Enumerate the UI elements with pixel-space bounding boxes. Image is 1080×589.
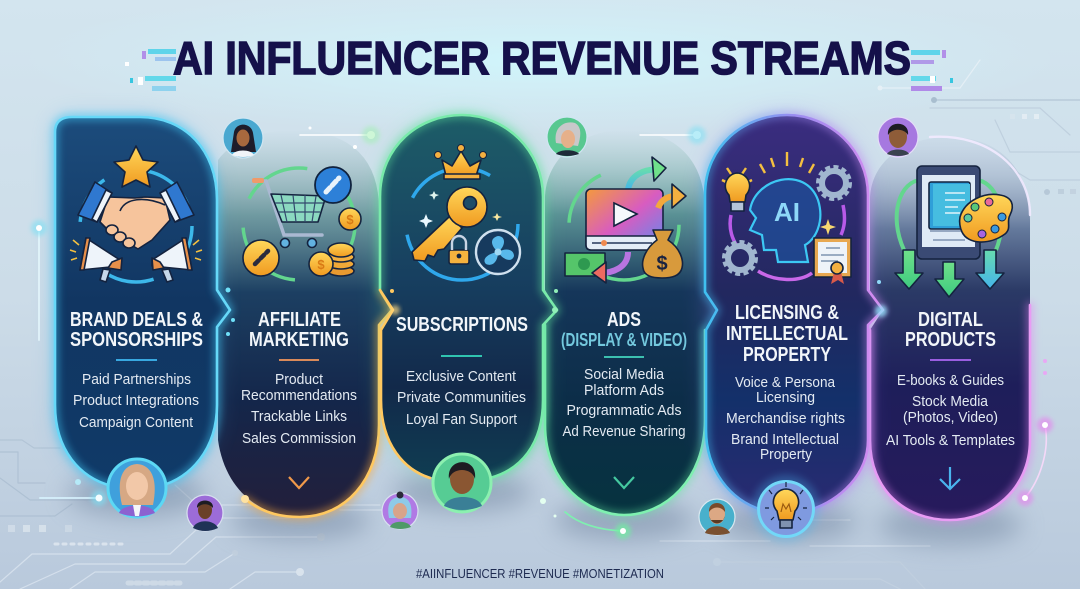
list: Voice & Persona — [735, 375, 836, 391]
list: Licensing — [756, 390, 815, 406]
list — [73, 372, 199, 431]
heading: ADS — [607, 309, 641, 331]
heading: DIGITAL — [918, 309, 983, 331]
icon: tablet, palette and arrows — [895, 166, 1012, 297]
list: (Photos, Video) — [903, 410, 998, 426]
heading — [905, 309, 996, 351]
heading: LICENSING & — [735, 302, 839, 324]
avatar: man on purple — [878, 117, 918, 157]
list — [562, 367, 686, 440]
list: Stock Media — [912, 394, 989, 410]
list: Product Integrations — [73, 393, 199, 409]
icon: AI head, bulb, gears and certificate: AI — [774, 197, 800, 227]
heading: SPONSORSHIPS — [70, 329, 203, 351]
list: Ad Revenue Sharing — [562, 424, 686, 440]
cyan border — [55, 117, 230, 486]
heading: AFFILIATE — [258, 309, 341, 331]
list: Private Communities — [397, 390, 526, 406]
heading: BRAND DEALS & — [70, 309, 203, 331]
heading — [561, 309, 687, 350]
list: Campaign Content — [79, 415, 193, 431]
list: E-books & Guides — [897, 373, 1004, 389]
list: Sales Commission — [242, 431, 356, 447]
panel drop shadows — [67, 472, 1022, 545]
icon: video player with money — [565, 157, 686, 283]
list: Programmatic Ads — [566, 403, 682, 419]
list: Trackable Links — [251, 409, 347, 425]
icon: AI head, bulb, gears and certificate — [722, 152, 851, 284]
list: Platform Ads — [584, 383, 664, 399]
green border — [545, 325, 705, 515]
icon: handshake, star and megaphones — [70, 146, 202, 282]
list: Social Media — [584, 367, 665, 383]
title glitch accents — [125, 49, 953, 91]
avatar: man on green — [433, 454, 491, 512]
heading — [726, 302, 848, 366]
heading: PRODUCTS — [905, 329, 996, 351]
orange border — [241, 292, 392, 517]
heading: (DISPLAY & VIDEO) — [561, 330, 687, 350]
icon: key, crown, lock and fan — [406, 144, 520, 280]
list: AI Tools & Templates — [886, 433, 1015, 449]
icon: light bulb badge — [752, 475, 820, 543]
icon: video player with money: $ — [656, 253, 668, 275]
list: Merchandise rights — [726, 411, 845, 427]
glowing connector accents — [31, 126, 1053, 539]
list: Brand Intellectual — [731, 432, 839, 448]
list — [241, 372, 357, 447]
panel: subscriptions — [380, 115, 557, 478]
avatar: blonde woman — [108, 459, 166, 517]
avatar: man in navy — [187, 495, 223, 531]
icon: chevron — [614, 477, 634, 488]
icon: down arrow — [940, 467, 960, 489]
list: Recommendations — [241, 388, 357, 404]
green and orange border — [380, 115, 557, 478]
list: Property — [760, 447, 813, 463]
heading — [70, 309, 203, 351]
panel: ads — [545, 130, 717, 515]
icon: chevron — [289, 477, 309, 488]
list: Product — [275, 372, 323, 388]
list: Exclusive Content — [406, 369, 516, 385]
list — [886, 373, 1015, 449]
avatar: woman with grey hair — [547, 117, 587, 157]
icon: shopping cart and coins: $ — [317, 257, 325, 272]
heading: PROPERTY — [743, 344, 832, 366]
list — [726, 375, 845, 463]
list — [397, 369, 526, 428]
panel: affiliate marketing — [218, 130, 392, 517]
panel: licensing and intellectual property — [705, 115, 883, 510]
list: Paid Partnerships — [82, 372, 191, 388]
avatar: bearded man — [699, 499, 735, 535]
title text: AI INFLUENCER REVENUE STREAMS — [173, 32, 911, 84]
heading: INTELLECTUAL — [726, 323, 848, 345]
hashtags: #AIINFLUENCER #REVENUE #MONETIZATION — [416, 567, 664, 581]
icon: shopping cart and coins — [243, 167, 361, 280]
list: Loyal Fan Support — [406, 412, 517, 428]
heading: MARKETING — [249, 329, 349, 351]
purple border — [870, 137, 1030, 520]
panel: digital products — [870, 137, 1030, 520]
avatar: woman with dark hair — [223, 118, 263, 158]
avatar: woman with blue hair — [382, 492, 418, 529]
gradient border — [705, 115, 883, 510]
heading — [249, 309, 349, 351]
heading: SUBSCRIPTIONS — [396, 314, 528, 336]
title — [125, 32, 953, 91]
panel: brand deals and sponsorships — [55, 117, 230, 486]
icon: shopping cart and coins: $ — [346, 212, 354, 227]
